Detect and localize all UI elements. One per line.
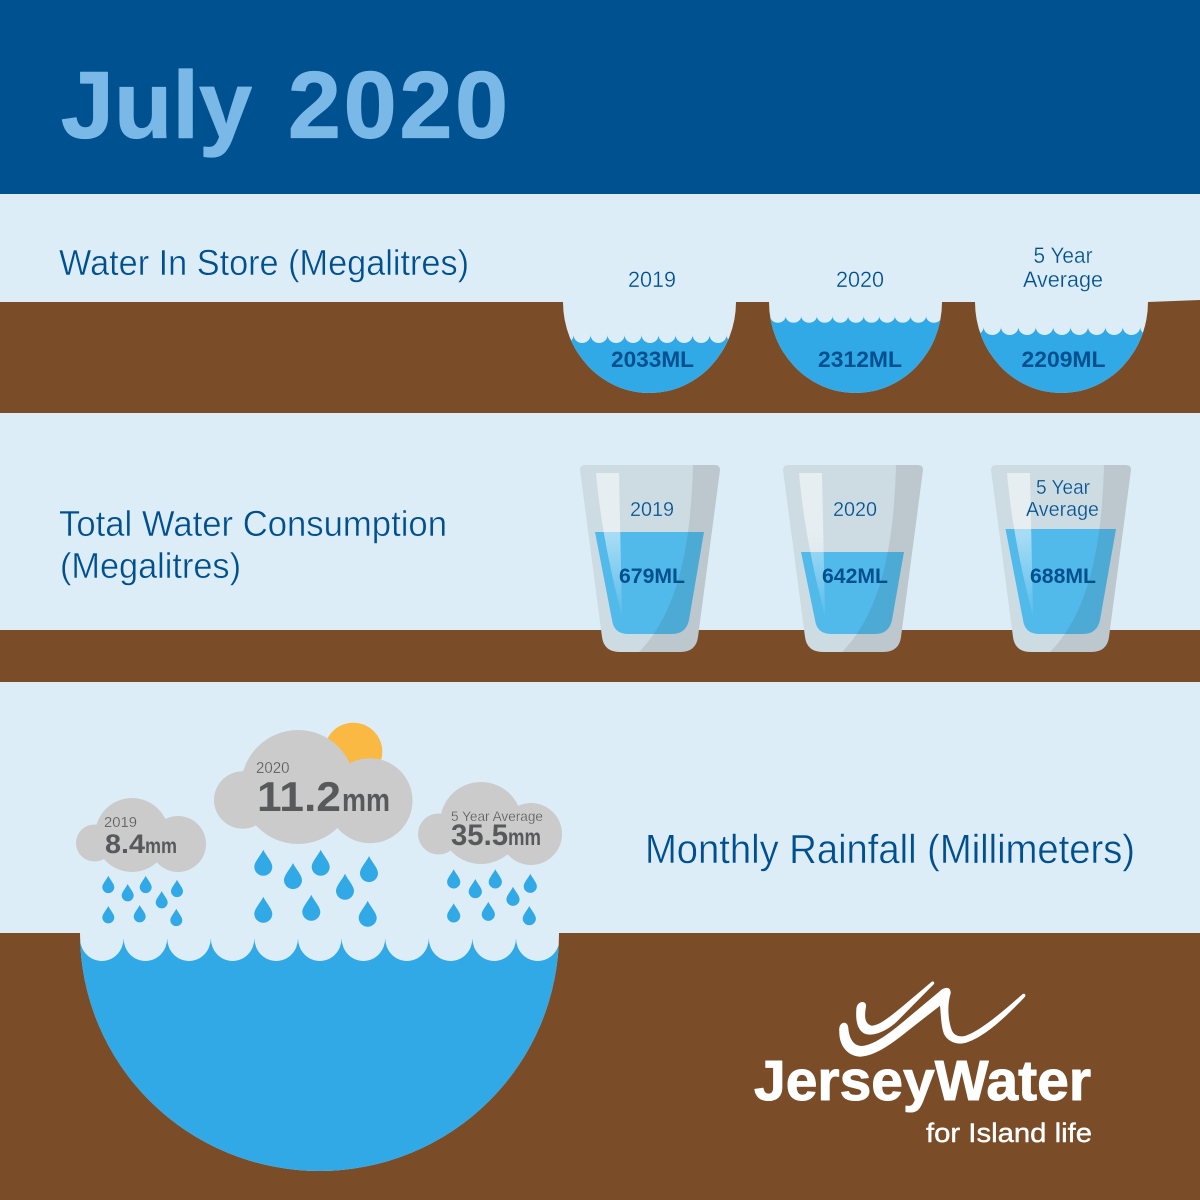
- cloud 2019 with rain: 8.4: [105, 829, 145, 859]
- cloud five year average with rain: 5 Year Average: [451, 808, 543, 824]
- glass 2020: 642ML: [822, 565, 888, 588]
- heading: total water consumption: (Megalitres): [60, 545, 241, 586]
- cloud 2020 with rain: 11.2: [257, 773, 341, 820]
- cloud five year average with rain: [418, 782, 562, 925]
- panel: water in store: [0, 248, 1200, 413]
- ground band: [0, 933, 1200, 1200]
- reservoir five year average: [975, 248, 1148, 393]
- reservoir 2020: [769, 272, 942, 393]
- ground band: [0, 300, 1200, 413]
- heading: total water consumption: Total Water Consumption: [59, 503, 447, 544]
- reservoir 2020: 2312ML: [818, 347, 902, 372]
- heading: monthly rainfall: Monthly Rainfall (Millimeters): [645, 826, 1135, 872]
- cloud five year average with rain: mm: [508, 824, 541, 850]
- title: 2020: [288, 52, 508, 158]
- title: July: [61, 52, 252, 158]
- glass five year average: Average: [1026, 499, 1099, 521]
- reservoir 2019: 2019: [628, 267, 676, 292]
- panel: monthly rainfall: [0, 695, 1200, 1200]
- glass five year average: [991, 465, 1131, 652]
- panel: total water consumption: [0, 465, 1200, 682]
- cloud 2019 with rain: mm: [145, 835, 177, 858]
- ground band: [0, 630, 1200, 682]
- heading: water in store: Water In Store (Megalitres): [59, 242, 469, 283]
- glass 2020: 2020: [833, 499, 877, 521]
- cloud 2019 with rain: [76, 798, 206, 926]
- reservoir 2019: 2033ML: [611, 347, 694, 372]
- rainfall pool: [80, 933, 559, 1171]
- glass 2019: [580, 465, 720, 652]
- reservoir 2020: 2020: [836, 267, 884, 292]
- glass 2020: [783, 465, 923, 652]
- sun: [324, 723, 382, 781]
- logo waves: [839, 981, 1025, 1057]
- reservoir five year average: Average: [1023, 267, 1103, 292]
- cloud 2020 with rain: [214, 730, 412, 927]
- reservoir five year average: 2209ML: [1022, 347, 1106, 372]
- reservoir five year average: 5 Year: [1034, 243, 1092, 268]
- logo tagline: for Island life: [926, 1118, 1092, 1148]
- cloud 2019 with rain: 2019: [104, 814, 137, 831]
- reservoir 2019: [563, 272, 736, 393]
- glass five year average: 688ML: [1030, 565, 1096, 588]
- header banner: [0, 0, 1200, 194]
- cloud 2020 with rain: mm: [342, 782, 390, 818]
- glass 2019: 2019: [630, 499, 674, 521]
- cloud five year average with rain: 35.5: [451, 819, 508, 852]
- glass 2019: 679ML: [619, 565, 685, 588]
- glass five year average: 5 Year: [1036, 477, 1090, 499]
- logo wordmark: JerseyWater: [754, 1049, 1091, 1113]
- cloud 2020 with rain: 2020: [256, 760, 290, 777]
- logo: Jersey Water: [754, 981, 1092, 1148]
